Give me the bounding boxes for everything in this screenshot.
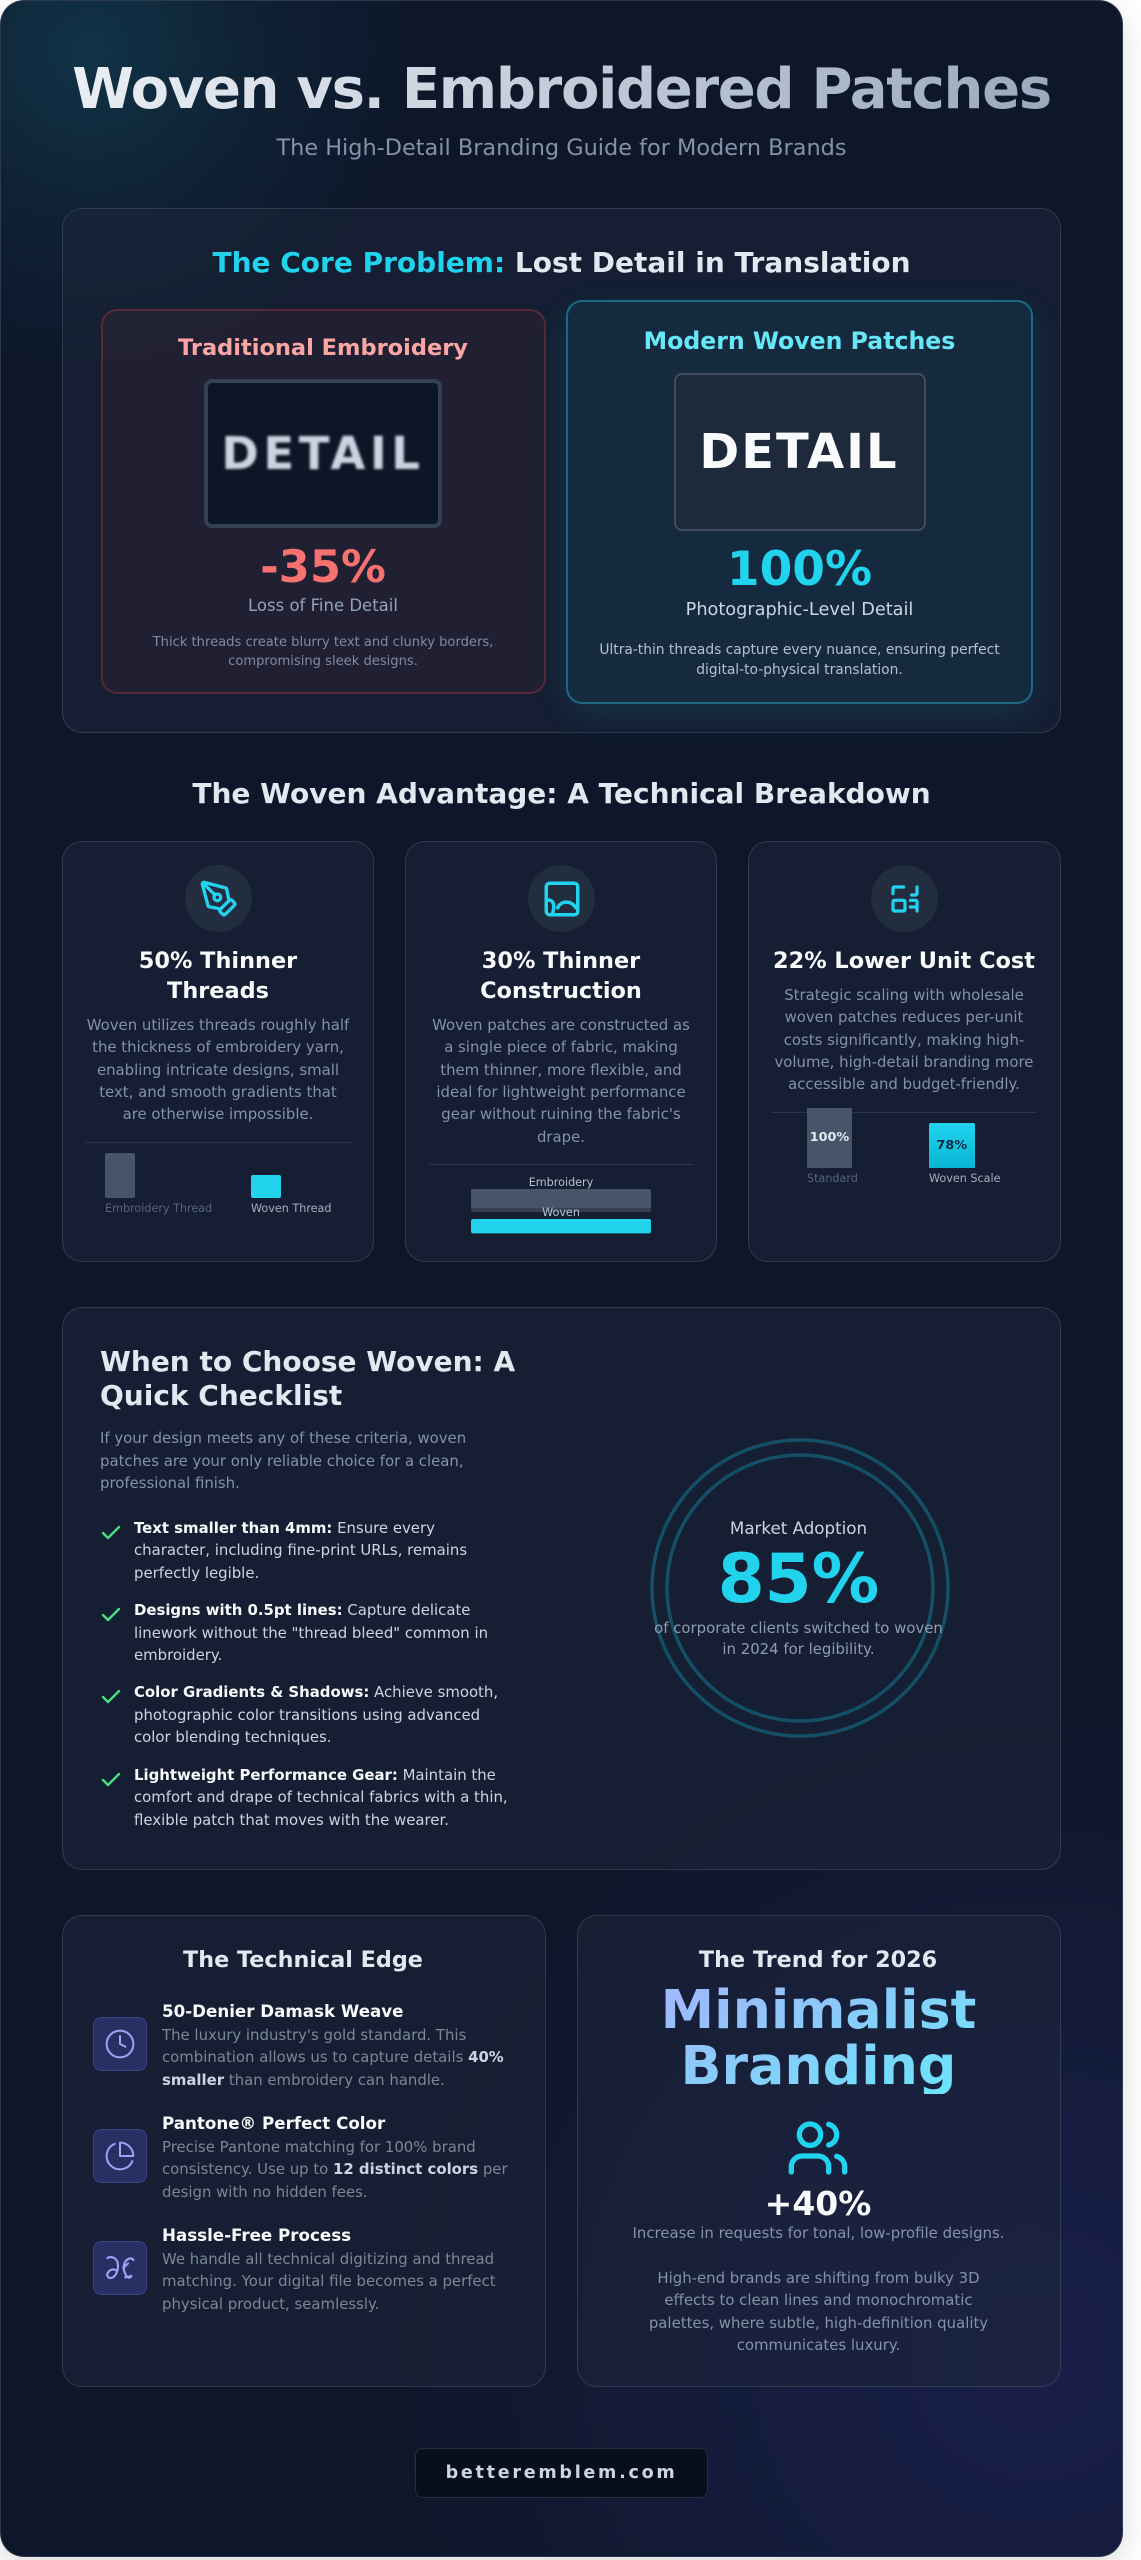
trend description: palettes, where subtle, high-definition quality [649,2314,988,2332]
feature text: Precise Pantone matching for 100% brand [162,2138,476,2156]
card text: drape. [537,1128,585,1146]
card text: costs significantly, making high- [784,1031,1024,1049]
trend description: High-end brands are shifting from bulky 3D [657,2269,980,2287]
checklist item: gradients: color blending techniques. [134,1728,332,1746]
icon: pie chart [93,2129,147,2183]
card text: Woven utilizes threads roughly half [87,1016,349,1034]
checklist item: small text: perfectly legible. [134,1564,259,1582]
bar: woven 78 percent: 78% [936,1138,967,1153]
panel: modern woven patches [566,300,1033,704]
feature title: 50-Denier Damask Weave [162,2001,403,2021]
bar: embroidery [471,1189,651,1212]
stat: 85 percent: 85% [718,1539,879,1618]
chart: thread thickness [105,1153,332,1215]
card text: text, and smooth gradients that [99,1083,337,1101]
checklist item: performance gear: Lightweight Performance Gear: Maintain the [134,1766,496,1784]
footer: website badge: betteremblem.com [446,2463,677,2483]
card text: a single piece of fabric, making [444,1038,678,1056]
title: Woven vs. Embroidered Patches [72,57,1051,122]
card text: volume, high-detail branding more [774,1053,1033,1071]
caption: corporate clients: in 2024 for legibility. [722,1640,875,1658]
patch sample: sharp detail [674,372,926,530]
feature text [162,2138,508,2201]
card text [432,1016,690,1146]
card text: enabling intricate designs, small [97,1061,339,1079]
card text: Strategic scaling with wholesale [784,986,1024,1004]
label: woven thread: Woven Thread [251,1202,332,1215]
icon: fabric [528,865,595,932]
panel: technical edge [62,1915,546,2387]
panel: trend for 2026 [577,1915,1061,2387]
checklist item: fine lines: embroidery. [134,1646,222,1664]
label: embroidery: Embroidery [529,1176,593,1189]
card heading: Construction [480,978,642,1004]
card text: gear without ruining the fabric's [441,1105,681,1123]
heading: core problem: The Core Problem: Lost Detail in Translation [212,246,911,279]
bar: standard 100 percent: 100% [810,1130,849,1145]
headline: minimalist branding [652,1982,984,2094]
trend description: effects to clean lines and monochromatic [664,2291,973,2309]
description: embroidery: compromising sleek designs. [228,654,418,669]
trend description: communicates luxury. [737,2336,900,2354]
description: woven: digital-to-physical translation. [696,662,903,678]
headline: minimalist branding: Branding [681,2034,956,2097]
stat label: photographic level detail: Photographic-Level Detail [686,600,913,620]
label: standard: Standard [807,1172,858,1185]
heading: checklist [100,1345,515,1412]
label: embroidery thread: Embroidery Thread [105,1202,212,1215]
icon: scale [871,865,938,932]
card text: them thinner, more flexible, and [440,1061,682,1079]
stat: minus 35 percent: -35% [260,540,386,593]
icon: check [102,1608,120,1622]
patch sample: sharp detail: DETAIL [699,424,899,480]
headline: minimalist branding: Minimalist [661,1978,976,2041]
card text: are otherwise impossible. [123,1105,313,1123]
feature: hassle-free process [93,2225,496,2313]
feature text: smaller than embroidery can handle. [162,2071,445,2089]
trend description [649,2269,988,2354]
panel: 50 percent thinner threads [62,841,374,1262]
checklist item: fine lines: Designs with 0.5pt lines: Capture delicate [134,1601,470,1619]
icon: check [102,1690,120,1704]
feature title: Hassle-Free Process [162,2225,351,2245]
description: woven: Ultra-thin threads capture every nuance, ensuring perfect [599,642,1000,658]
feature text: physical product, seamlessly. [162,2295,379,2313]
feature text: combination allows us to capture details 40% [162,2048,504,2066]
chart: construction thickness [471,1176,651,1234]
intro text [100,1429,466,1492]
chart: market adoption ring [650,1438,950,1738]
feature: 50-denier damask weave [93,2001,504,2089]
checklist item: gradients: Color Gradients & Shadows: Achieve smooth, [134,1683,498,1701]
card text: woven patches reduces per-unit [785,1008,1023,1026]
card text: Woven patches are constructed as [432,1016,690,1034]
bar: embroidery thread [105,1153,135,1198]
panel: 22 percent lower unit cost [748,841,1061,1262]
stat label: loss of fine detail: Loss of Fine Detail [248,596,398,615]
checklist item: gradients: photographic color transitions using advanced [134,1706,480,1724]
intro text: patches are your only reliable choice for a clean, [100,1452,464,1470]
label: market adoption: Market Adoption [730,1518,867,1538]
feature title: Pantone® Perfect Color [162,2113,385,2133]
description: woven [599,642,1000,678]
checklist item: gradients [102,1683,498,1746]
icon: check [102,1772,120,1786]
patch sample: blurred detail: DETAIL [221,427,425,480]
icon: process [93,2241,147,2295]
bar: woven [471,1219,651,1232]
feature text [162,2026,504,2089]
checklist item: performance gear: comfort and drape of technical fabrics with a thin, [134,1788,508,1806]
icon: clock [93,2017,147,2071]
card heading [139,948,298,1004]
caption: corporate clients [654,1618,943,1658]
checklist item: performance gear [102,1766,508,1828]
feature text: consistency. Use up to 12 distinct colors per [162,2160,508,2178]
stat caption: Increase in requests for tonal, low-profile designs. [633,2224,1004,2242]
heading: checklist: When to Choose Woven: A [100,1345,515,1378]
card text [87,1016,350,1123]
icon: users [788,2121,848,2175]
footer: website badge [415,2448,708,2498]
feature: pantone perfect color [93,2113,508,2201]
feature text: The luxury industry's gold standard. This [162,2026,466,2044]
feature text: matching. Your digital file becomes a perfect [162,2272,496,2290]
bar: standard 100 percent [807,1108,852,1168]
stat: plus 40 percent: +40% [765,2184,871,2223]
checklist item: fine lines [102,1601,488,1664]
card heading: 22% Lower Unit Cost [773,948,1035,974]
panel: core problem [62,208,1061,733]
description: embroidery [152,635,493,669]
heading: trend: The Trend for 2026 [699,1947,937,1973]
intro text: If your design meets any of these criteria, woven [100,1429,466,1447]
panel: 30 percent thinner construction [405,841,717,1262]
checklist item: small text [102,1519,467,1582]
icon: check [102,1526,120,1540]
subtitle: The High-Detail Branding Guide for Modern Brands [276,135,847,161]
card text: accessible and budget-friendly. [788,1075,1020,1093]
feature text [162,2250,496,2313]
caption: corporate clients: of corporate clients switched to woven [654,1618,943,1636]
label: woven scale: Woven Scale [929,1172,1000,1185]
icon: pen tool [185,865,252,932]
card text: the thickness of embroidery yarn, [92,1038,344,1056]
stat: 100 percent: 100% [727,542,872,597]
card text: ideal for lightweight performance [436,1083,686,1101]
bar: woven thread [251,1175,281,1198]
card heading: 30% Thinner [482,948,640,974]
label: woven: Woven [542,1206,580,1219]
checklist item: small text: Text smaller than 4mm: Ensure every [134,1519,435,1537]
heading: checklist: Quick Checklist [100,1379,342,1412]
patch sample: blurred detail [204,379,442,528]
heading: technical edge: The Technical Edge [183,1947,423,1973]
feature text: We handle all technical digitizing and thread [162,2250,494,2268]
panel: checklist [62,1307,1061,1870]
description: embroidery: Thick threads create blurry text and clunky borders, [153,635,493,650]
card heading: 50% Thinner [139,948,297,974]
chart: unit cost [807,1108,1000,1185]
feature text: design with no hidden fees. [162,2183,368,2201]
checklist item: small text: character, including fine-print URLs, remains [134,1541,467,1559]
checklist item: fine lines: linework without the "thread bleed" common in [134,1624,488,1642]
checklist item: performance gear: flexible patch that moves with the wearer. [134,1810,449,1828]
panel: traditional embroidery [100,309,546,694]
heading: woven advantage: The Woven Advantage: A Technical Breakdown [192,777,931,810]
card heading [480,948,642,1004]
card heading: Threads [167,978,269,1004]
heading: modern woven patches: Modern Woven Patches [644,327,955,355]
intro text: professional finish. [100,1474,240,1492]
bar: woven 78 percent [929,1123,974,1168]
heading: traditional embroidery: Traditional Embroidery [178,335,468,361]
card text [774,986,1033,1093]
